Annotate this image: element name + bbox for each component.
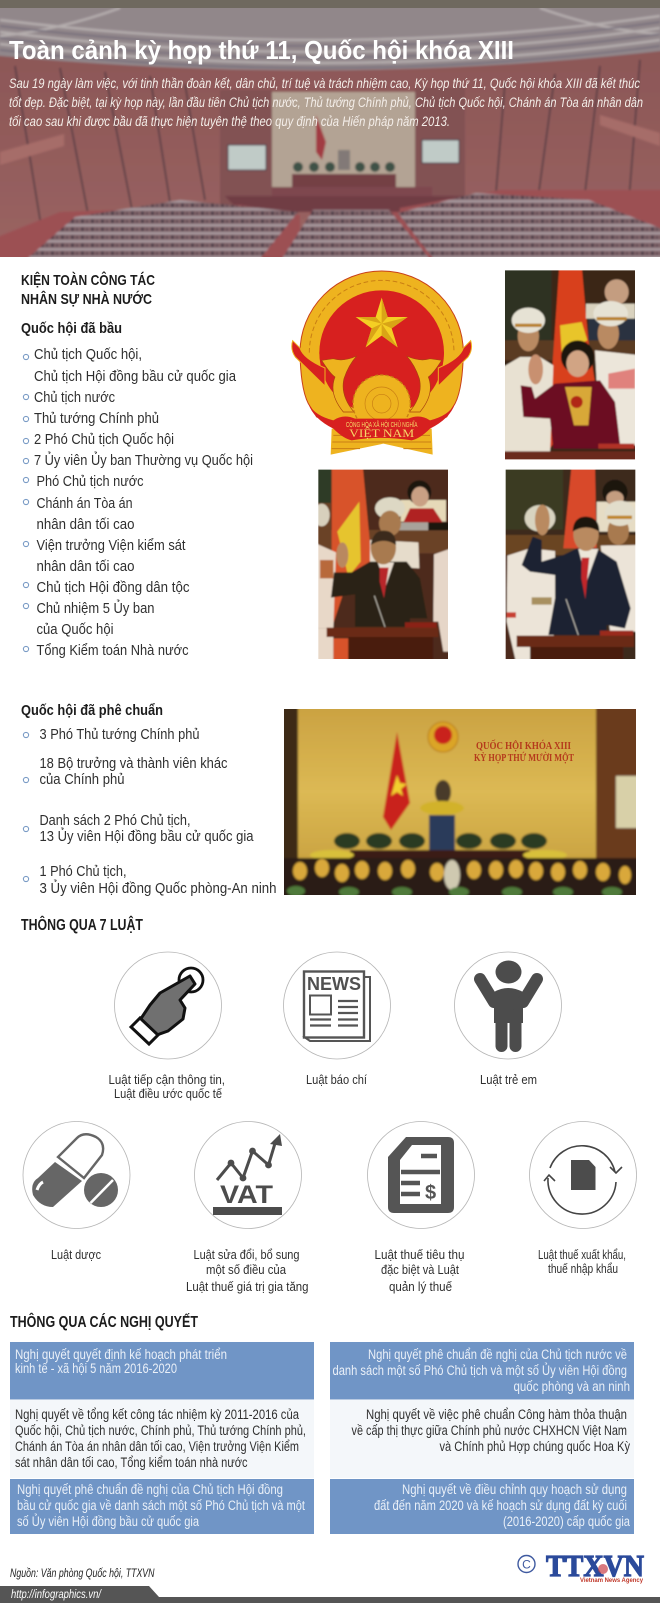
icon: child [480, 960, 537, 1046]
list: approved positions: của Chính phủ [40, 772, 124, 788]
national emblem [292, 271, 472, 455]
national emblem: CỘNG HÒA XÃ HỘI CHỦ NGHĨA [346, 420, 418, 429]
photo: National Assembly chair swearing in [505, 270, 635, 460]
resolutions table: right column [330, 1342, 634, 1534]
list: approved positions: 3 Ủy viên Hội đồng Quốc phòng-An ninh [40, 879, 276, 897]
list: elected positions: Thủ tướng Chính phủ [34, 411, 159, 427]
header tint [0, 8, 660, 257]
subheading: approved: Quốc hội đã phê chuẩn [21, 702, 163, 719]
photo: group with flowers: QUỐC HỘI KHÓA XIII [476, 739, 571, 752]
law: VAT: một số điều của [206, 1263, 286, 1277]
list: elected positions: nhân dân tối cao [36, 559, 134, 575]
list: elected positions: Chủ tịch Quốc hội, [34, 347, 142, 363]
photo: group with flowers: KỲ HỌP THỨ MƯỜI MỘT [474, 751, 574, 764]
photo: group with flowers [284, 709, 636, 895]
resolutions table: left column: Nghị quyết phê chuẩn đề nghị của Chủ tịch Hội đồng [17, 1482, 283, 1497]
list: elected positions: Chánh án Tòa án [36, 496, 132, 512]
TTXVN logo: C [522, 1558, 531, 1572]
law: access to information: Luật điều ước quốc tế [114, 1087, 222, 1101]
TTXVN logo: Vietnam News Agency [580, 1577, 643, 1584]
section heading: personnel: KIỆN TOÀN CÔNG TÁC [21, 271, 155, 289]
footer bar [0, 1586, 660, 1603]
list: elected positions: Chủ tịch Hội đồng dân tộc [36, 580, 190, 596]
list: elected positions: Tổng Kiểm toán Nhà nước [36, 643, 188, 659]
icon: pointing hand [140, 976, 195, 1036]
law: access to information: Luật tiếp cận thông tin, [108, 1073, 225, 1087]
header panel [0, 0, 660, 265]
law: access to information [108, 952, 225, 1101]
resolutions table: left column: Quốc hội, Chủ tịch nước, Chính phủ, Thủ tướng Chính phủ, [15, 1423, 306, 1438]
list: elected positions [23, 347, 253, 659]
resolutions table: left column [10, 1342, 314, 1534]
resolutions table: left column: sát nhân dân tối cao, Tổng kiểm toán nhà nước [15, 1455, 248, 1470]
law: import-export tax [530, 1122, 636, 1276]
section heading: personnel: NHÂN SỰ NHÀ NƯỚC [21, 290, 152, 308]
national emblem: VIỆT NAM [349, 426, 415, 440]
intro paragraph [9, 76, 643, 129]
list: approved positions: 13 Ủy viên Hội đồng bầu cử quốc gia [40, 827, 254, 845]
law: press: Luật báo chí [306, 1073, 367, 1087]
resolutions table: left column: Chánh án Tòa án nhân dân tối cao, Viện trưởng Viện Kiểm [15, 1439, 299, 1454]
list: elected positions: Chủ tịch Hội đồng bầu cử quốc gia [34, 369, 237, 385]
law: children: Luật trẻ em [480, 1073, 537, 1087]
law: pharmacy: Luật dược [51, 1248, 101, 1262]
list: elected positions: 7 Ủy viên Ủy ban Thường vụ Quốc hội [34, 451, 253, 469]
list: elected positions: Chủ tịch nước [34, 390, 115, 406]
law: children [454, 952, 562, 1087]
resolutions table: right column: quốc phòng và an ninh [514, 1379, 630, 1394]
footer bar: http://infographics.vn/ [11, 1589, 102, 1601]
photo: State President swearing in [506, 470, 636, 659]
list: elected positions: 2 Phó Chủ tịch Quốc hội [34, 432, 174, 448]
law: VAT: Luật sửa đổi, bổ sung [194, 1248, 300, 1262]
resolutions table: left column: Nghị quyết quyết định kế hoạch phát triển [15, 1347, 227, 1362]
top band [0, 0, 660, 8]
section heading: personnel [21, 271, 155, 308]
icon: pills [32, 1134, 118, 1207]
resolutions table: left column: số Ủy viên Hội đồng bầu cử quốc gia [17, 1514, 199, 1529]
law: import-export tax: thuế nhập khẩu [548, 1262, 618, 1276]
resolutions table: left column: Nghị quyết về tổng kết công tác nhiệm kỳ 2011-2016 của [15, 1407, 299, 1422]
subheading: elected: Quốc hội đã bầu [21, 320, 122, 337]
list: elected positions: Chủ nhiệm 5 Ủy ban [36, 599, 154, 617]
photo: Prime Minister swearing in [318, 470, 448, 659]
source note: Nguồn: Văn phòng Quốc hội, TTXVN [10, 1566, 155, 1580]
resolutions table: right column: (2016-2020) cấp quốc gia [503, 1514, 630, 1529]
icon: tax document [388, 1137, 454, 1213]
list: elected positions: Viện trưởng Viện kiểm sát [36, 538, 186, 554]
law: import-export tax: Luật thuế xuất khẩu, [538, 1248, 626, 1262]
list: elected positions: nhân dân tối cao [36, 517, 134, 533]
title: Toàn cảnh kỳ họp thứ 11, Quốc hội khóa XIII [9, 35, 514, 65]
law: press [284, 952, 390, 1087]
list: approved positions [23, 727, 277, 897]
icon: newspaper: NEWS [307, 974, 361, 994]
law: VAT [186, 1122, 309, 1294]
header photo: assembly hall [0, 0, 660, 265]
intro paragraph: tối cao sau khi được bầu đã thực hiện tuyên thệ theo quy định của Hiến pháp năm 2013. [9, 114, 450, 129]
TTXVN logo: TTXVN [546, 1548, 644, 1583]
TTXVN logo [518, 1548, 644, 1584]
law: pharmacy [23, 1122, 130, 1262]
list: elected positions: của Quốc hội [36, 622, 114, 638]
icon: tax document: $ [425, 1182, 436, 1204]
law: special consumption tax: quản lý thuế [389, 1280, 452, 1294]
list: approved positions: 1 Phó Chủ tịch, [40, 864, 126, 880]
law: special consumption tax: đặc biệt và Luật [381, 1263, 459, 1277]
resolutions table: left column: kinh tế - xã hội 5 năm 2016-2020 [15, 1361, 177, 1376]
icon: document cycle [544, 1146, 622, 1214]
icon: VAT chart: VAT [220, 1181, 273, 1209]
law: special consumption tax: Luật thuế tiêu thụ [374, 1248, 465, 1262]
section heading: seven laws: THÔNG QUA 7 LUẬT [21, 915, 143, 934]
icon: VAT chart [213, 1134, 282, 1215]
list: elected positions: Phó Chủ tịch nước [36, 474, 144, 490]
resolutions table: left column: bầu cử quốc gia về danh sách một số Phó Chủ tịch và một [17, 1498, 305, 1513]
law: special consumption tax [368, 1122, 474, 1294]
list: approved positions: 3 Phó Thủ tướng Chính phủ [40, 727, 200, 743]
list: approved positions: Danh sách 2 Phó Chủ tịch, [40, 813, 190, 829]
law: VAT: Luật thuế giá trị gia tăng [186, 1280, 309, 1294]
section heading: resolutions: THÔNG QUA CÁC NGHỊ QUYẾT [10, 1312, 198, 1331]
list: approved positions: 18 Bộ trưởng và thành viên khác [40, 756, 228, 772]
